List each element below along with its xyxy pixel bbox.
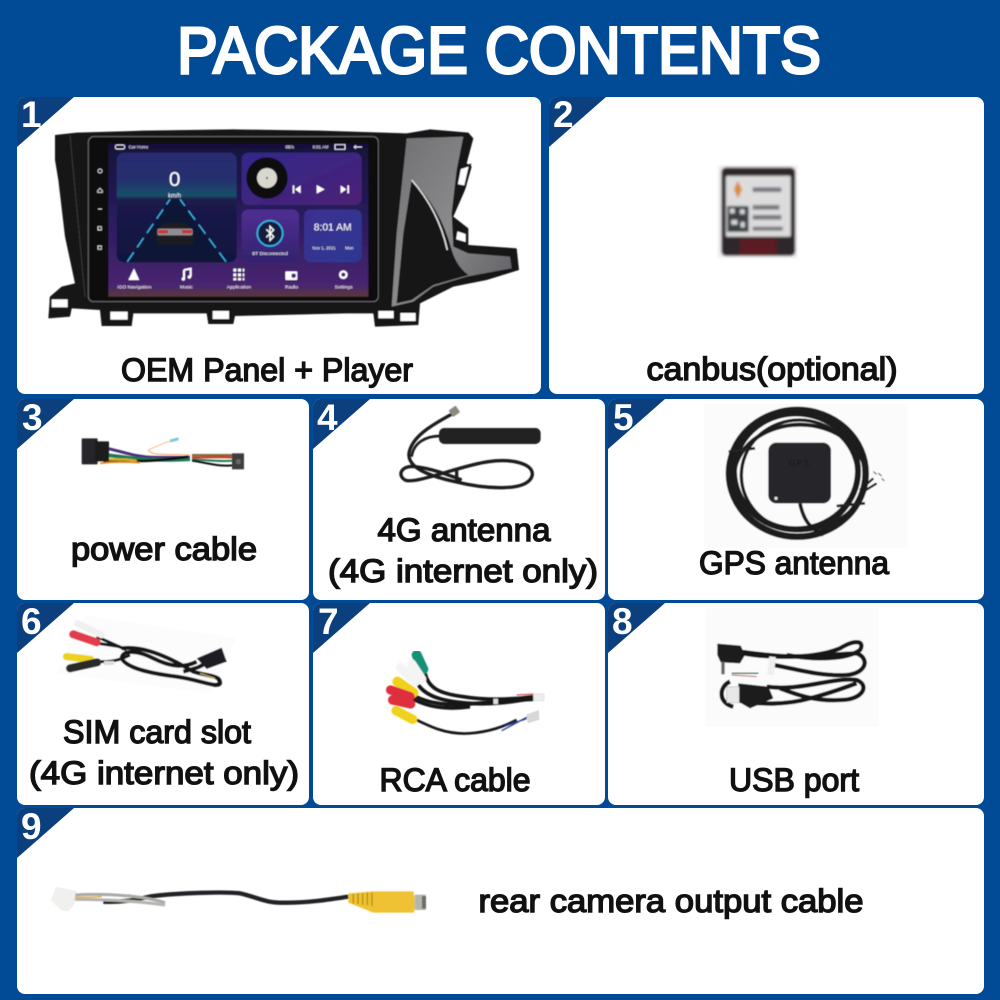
image: GPS antenna (704, 404, 907, 548)
panel 7: RCA cable (313, 601, 605, 805)
badge 5 (608, 397, 665, 449)
image: 4G antenna (401, 406, 541, 488)
status bar (115, 145, 362, 150)
speed tile: km/h (168, 194, 181, 200)
image: USB cable (705, 608, 879, 727)
panel 5: GPS antenna (608, 397, 984, 600)
badge 7 (313, 601, 370, 653)
label: power cable (71, 531, 257, 567)
image: head unit with dash panel (48, 129, 519, 327)
image: GPS antenna: GPS (789, 459, 811, 468)
badge 7: 7 (318, 601, 339, 642)
status bar: 0B/s (285, 145, 294, 150)
badge 4 (313, 397, 370, 449)
label: (4G internet only) (328, 553, 598, 589)
clock tile (304, 209, 362, 262)
badge 1: 1 (21, 94, 42, 135)
status bar: 8:01 AM (313, 145, 329, 150)
screen bezel (88, 137, 378, 302)
mount tabs (51, 165, 470, 322)
status bar: Car Home (129, 145, 149, 150)
label: rear camera output cable (478, 883, 864, 919)
app dock (117, 268, 353, 291)
badge 3: 3 (22, 397, 43, 438)
side buttons (98, 169, 102, 249)
title: PACKAGE CONTENTS (177, 13, 821, 87)
frame (48, 129, 519, 327)
label: 4G antenna (378, 512, 551, 548)
label: canbus(optional) (646, 351, 898, 387)
app dock: Settings (335, 285, 353, 291)
badge 8: 8 (612, 601, 633, 642)
panel 6: SIM card slot (17, 601, 309, 805)
panel 3: power cable (17, 397, 309, 600)
app dock: Radio (285, 285, 298, 291)
speed tile: 0 (169, 168, 180, 191)
image: SIM card cable (57, 615, 237, 693)
label: GPS antenna (699, 545, 889, 581)
clock tile: Mon (345, 246, 354, 251)
badge 8 (608, 601, 665, 653)
badge 9 (17, 806, 74, 858)
badge 1 (17, 94, 74, 147)
label: RCA cable (380, 762, 530, 798)
label (328, 512, 598, 589)
app dock: Music (180, 285, 193, 291)
panel 2: canbus (549, 94, 984, 394)
app dock: Application (227, 285, 251, 291)
image: RCA cable bundle (391, 655, 544, 734)
label: SIM card slot (63, 714, 251, 750)
badge 2 (549, 94, 606, 147)
image: rear camera cable (52, 887, 426, 913)
label: (4G internet only) (29, 755, 299, 791)
badge 6: 6 (21, 601, 42, 642)
badge 4: 4 (317, 397, 338, 438)
badge 6 (17, 601, 74, 653)
badge 9: 9 (21, 806, 42, 847)
label: USB port (729, 762, 859, 798)
clock tile: Nov 1, 2021 (312, 246, 336, 251)
panel 1: OEM panel and player (17, 94, 541, 394)
image: power harness (82, 437, 244, 469)
badge 5: 5 (613, 397, 634, 438)
music tile (242, 153, 362, 205)
panel 8: USB port (608, 601, 984, 805)
label (29, 714, 299, 791)
label: OEM Panel + Player (121, 352, 413, 388)
panel 9: rear camera output cable (17, 806, 984, 994)
clock tile: 8:01 AM (314, 223, 352, 234)
badge 3 (17, 397, 74, 449)
panel 4: 4G antenna (313, 397, 605, 600)
image: canbus module (718, 165, 797, 258)
bluetooth tile: BT Disconnected (252, 251, 288, 256)
app dock: iGO Navigation (117, 285, 151, 291)
badge 2: 2 (553, 94, 574, 135)
bluetooth tile (242, 209, 299, 262)
speed tile (117, 153, 237, 262)
